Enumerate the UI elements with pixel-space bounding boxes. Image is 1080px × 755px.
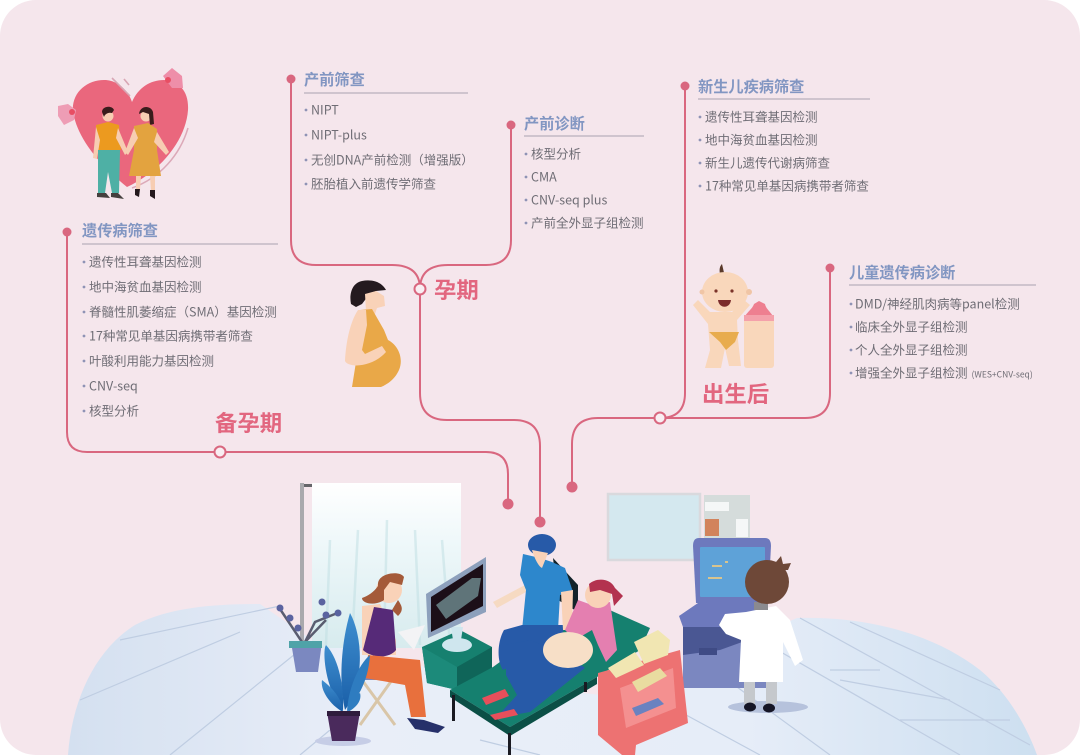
illustration: ultrasound monitor: [422, 557, 492, 690]
list: 产前诊断项目: CMA: [531, 166, 557, 186]
list: 新生儿疾病筛查项目: 新生儿遗传代谢病筛查: [705, 152, 831, 172]
panel: 儿童遗传病诊断: [849, 261, 1036, 382]
list: 儿童遗传病诊断项目: [850, 294, 1033, 382]
list: 遗传病筛查项目: CNV-seq: [89, 376, 138, 394]
illustration: wall board and cabinet: [608, 494, 750, 560]
list: 遗传病筛查项目: 脊髓性肌萎缩症（SMA）基因检测: [89, 302, 277, 320]
list: 遗传病筛查项目: 叶酸利用能力基因检测: [89, 350, 214, 370]
heading: 出生后: 出生后: [702, 377, 769, 409]
list: 儿童遗传病诊断项目: 增强全外显子组检测 (WES+CNV-seq): [855, 362, 1033, 382]
panel: 产前诊断: [524, 112, 644, 232]
list: 产前筛查项目: 无创DNA产前检测（增强版）: [311, 150, 474, 168]
list: 遗传病筛查项目: 核型分析: [89, 400, 139, 420]
icon: pregnant woman: [345, 280, 401, 387]
illustration: sonographer on stool: [360, 573, 445, 733]
list: 遗传病筛查项目: 17种常见单基因病携带者筛查: [89, 326, 253, 344]
list: 新生儿疾病筛查项目: 17种常见单基因病携带者筛查: [705, 176, 869, 194]
list: 产前筛查项目: NIPT: [311, 100, 339, 118]
illustration: doctor in blue scrubs: [493, 534, 578, 670]
connector lines: [62, 74, 834, 528]
list: 产前筛查项目: NIPT-plus: [311, 124, 367, 144]
list: 产前诊断项目: CNV-seq plus: [531, 190, 607, 208]
list: 新生儿疾病筛查项目: 地中海贫血基因检测: [705, 130, 818, 148]
illustration: curtain: [300, 483, 461, 648]
illustration: lab machine: [679, 538, 771, 688]
list: 产前诊断项目: 核型分析: [531, 144, 581, 162]
heading: 新生儿疾病筛查: 新生儿疾病筛查: [698, 75, 804, 97]
list: 遗传病筛查项目: 遗传性耳聋基因检测: [89, 252, 202, 270]
list: 产前诊断项目: 产前全外显子组检测: [531, 212, 644, 232]
list: 产前诊断项目: [525, 144, 644, 232]
list: 新生儿疾病筛查项目: 遗传性耳聋基因检测: [705, 106, 818, 126]
man: [93, 107, 128, 199]
illustration: red shelf with boxes: [598, 630, 688, 755]
illustration: doctor from behind: [719, 556, 808, 713]
list: 儿童遗传病诊断项目: 临床全外显子组检测: [855, 316, 968, 336]
list: 新生儿疾病筛查项目: [699, 106, 869, 194]
woman: [125, 107, 169, 199]
list: 遗传病筛查项目: [83, 252, 277, 420]
illustration: examination bed: [450, 607, 650, 755]
list: 遗传病筛查项目: 地中海贫血基因检测: [89, 276, 202, 296]
floor: [68, 604, 1037, 755]
list: 产前筛查项目: [305, 100, 474, 192]
icon: baby with bottle: [693, 264, 774, 368]
heading: 儿童遗传病诊断: 儿童遗传病诊断: [849, 261, 955, 283]
heading: 产前筛查: 产前筛查: [304, 68, 365, 90]
icon: couple with heart: [58, 68, 188, 199]
heading: 产前诊断: 产前诊断: [524, 112, 585, 134]
heading: 遗传病筛查: 遗传病筛查: [82, 219, 158, 241]
panel: 新生儿疾病筛查: [698, 75, 870, 194]
illustration: small potted plant: [276, 598, 342, 672]
list: 儿童遗传病诊断项目: 个人全外显子组检测: [855, 340, 968, 358]
illustration: pregnant patient: [482, 580, 623, 720]
panel: 产前筛查: [304, 68, 474, 192]
list: 儿童遗传病诊断项目: DMD/神经肌肉病等panel检测: [855, 294, 1020, 312]
illustration: tall potted plant: [315, 613, 371, 746]
heading: 孕期: 孕期: [434, 273, 479, 305]
panel: 遗传病筛查: [82, 219, 278, 420]
list: 产前筛查项目: 胚胎植入前遗传学筛查: [311, 174, 437, 192]
heading: 备孕期: 备孕期: [215, 406, 282, 438]
